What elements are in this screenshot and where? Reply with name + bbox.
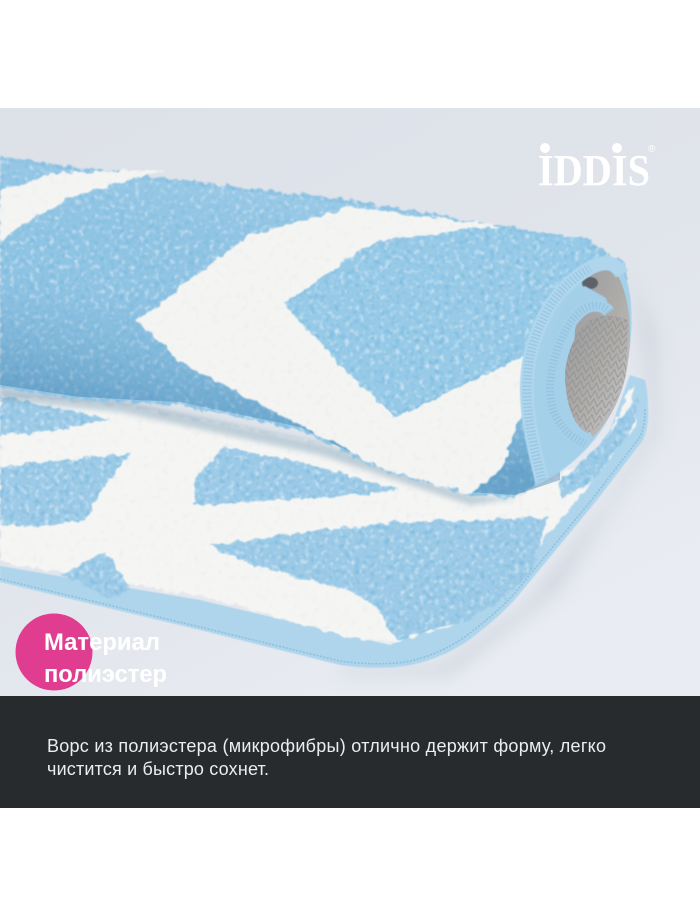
logo registered mark: ®	[648, 144, 656, 155]
backing mesh	[565, 316, 628, 433]
lower mat white pile	[0, 385, 636, 643]
iddis logo	[539, 143, 656, 186]
badge line: polyester: полиэстер	[44, 661, 167, 688]
roll end base	[534, 273, 632, 486]
lower mat blue patches	[0, 395, 640, 640]
logo dot left	[540, 143, 550, 153]
inner binding	[576, 302, 614, 327]
outer grey backing	[570, 267, 630, 437]
upper rolled mat	[0, 150, 630, 500]
caption line 2: чистится и быстро сохнет.	[47, 759, 269, 779]
outer binding stitching	[527, 268, 590, 480]
badge text	[46, 634, 166, 687]
roll blue pile	[0, 156, 630, 498]
mat shadow	[357, 315, 657, 678]
caption line 1: Ворс из полиэстера (микрофибры) отлично держит форму, легко	[47, 736, 606, 756]
roll light blue diamond	[285, 228, 600, 417]
caption text	[47, 736, 606, 779]
dark gap	[582, 277, 598, 289]
logo dot right	[612, 143, 622, 153]
photo backdrop	[0, 108, 700, 696]
badge line: material: Материал	[44, 629, 160, 656]
pink circle badge	[16, 614, 92, 690]
roll white pattern	[0, 170, 528, 494]
roll end with backing	[527, 258, 631, 486]
inner blue pile	[580, 286, 610, 312]
outer binding	[527, 263, 622, 480]
roll shading	[0, 150, 560, 500]
lower mat layer	[0, 375, 648, 668]
product photo: rolled bath mat	[0, 108, 700, 696]
inner grey backing	[565, 340, 626, 433]
binding stitching	[0, 408, 645, 664]
inner binding stitching	[550, 306, 609, 444]
logo wordmark: IDDIS	[538, 146, 650, 195]
shading fill	[0, 150, 560, 500]
lower mat fold shadow	[0, 388, 520, 505]
dark caption band	[0, 696, 700, 808]
lower mat edge binding	[0, 375, 648, 668]
